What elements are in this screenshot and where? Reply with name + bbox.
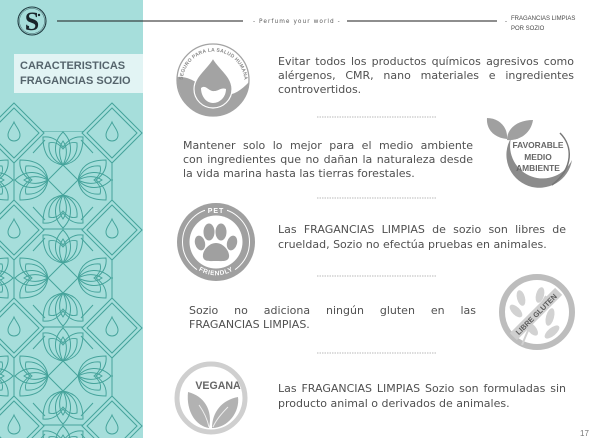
text block 4: [189, 304, 476, 331]
icon: seguro para la salud humana: SEGURO PARA LA SALUD HUMANA: [179, 48, 248, 80]
icon: favorable medio ambiente: [487, 118, 572, 188]
text block 2: la vida marina hasta las tierras forestales.: [183, 167, 415, 180]
text block 5: Las FRAGANCIAS LIMPIAS Sozio son formuladas sin: [278, 382, 566, 395]
separator 1: [317, 116, 437, 118]
section label: [505, 16, 575, 32]
icon: favorable medio ambiente: AMBIENTE: [516, 163, 560, 173]
text block 5: [278, 382, 566, 410]
text block 1: Evitar todos los productos químicos agresivos como: [278, 55, 574, 68]
heading text: [20, 60, 131, 86]
heading text: CARACTERISTICAS: [20, 60, 125, 72]
text block 2: con ingredientes que no dañan la naturaleza desde: [183, 153, 473, 166]
text block 3: [278, 223, 566, 251]
text block 4: FRAGANCIAS LIMPIAS.: [189, 318, 310, 331]
text block 4: Sozio no adiciona ningún gluten en las: [189, 304, 476, 317]
page number: 17: [580, 429, 589, 438]
heading text: FRAGANCIAS SOZIO: [20, 74, 131, 86]
panel: decorative teal sidebar: [0, 0, 143, 438]
header: logo and rule: [17, 6, 576, 36]
section label: -: [505, 19, 507, 25]
text block 2: Mantener solo lo mejor para el medio ambiente: [183, 139, 473, 152]
section label: POR SOZIO: [511, 26, 545, 32]
text block 2: [183, 139, 473, 180]
separator 2: [317, 197, 437, 199]
icon: vegana: [177, 364, 245, 432]
separator 4: [317, 352, 437, 354]
text block 3: Las FRAGANCIAS LIMPIAS de sozio son libres de: [278, 223, 566, 236]
text block 1: controvertidos.: [278, 83, 361, 96]
icon: pet friendly: [177, 203, 255, 281]
separator 3: [317, 275, 437, 277]
icon: libre gluten: [502, 277, 572, 347]
text block 1: alérgenos, CMR, nano materiales e ingredientes: [278, 69, 574, 82]
icon: Sozio logo: [18, 7, 46, 36]
icon: vegana: VEGANA: [195, 380, 241, 392]
icon: libre gluten: LIBRE GLUTEN: [514, 292, 559, 337]
section label: FRAGANCIAS LIMPIAS: [511, 16, 575, 22]
icon: Sozio logo: S: [25, 7, 39, 36]
text block 3: crueldad, Sozio no efectúa pruebas en animales.: [278, 238, 547, 251]
icon: pet friendly: FRIENDLY: [199, 266, 232, 276]
icon: favorable medio ambiente: FAVORABLE: [512, 140, 564, 150]
header rules: [57, 20, 497, 22]
icon: seguro para la salud humana: [176, 43, 250, 117]
icon: pet friendly: PET: [208, 208, 224, 215]
tagline: - Perfume your world -: [253, 19, 341, 25]
title box: [14, 54, 143, 93]
text block 1: [278, 55, 574, 96]
icon: favorable medio ambiente: MEDIO: [524, 152, 552, 162]
text block 5: producto animal o derivados de animales.: [278, 397, 510, 410]
